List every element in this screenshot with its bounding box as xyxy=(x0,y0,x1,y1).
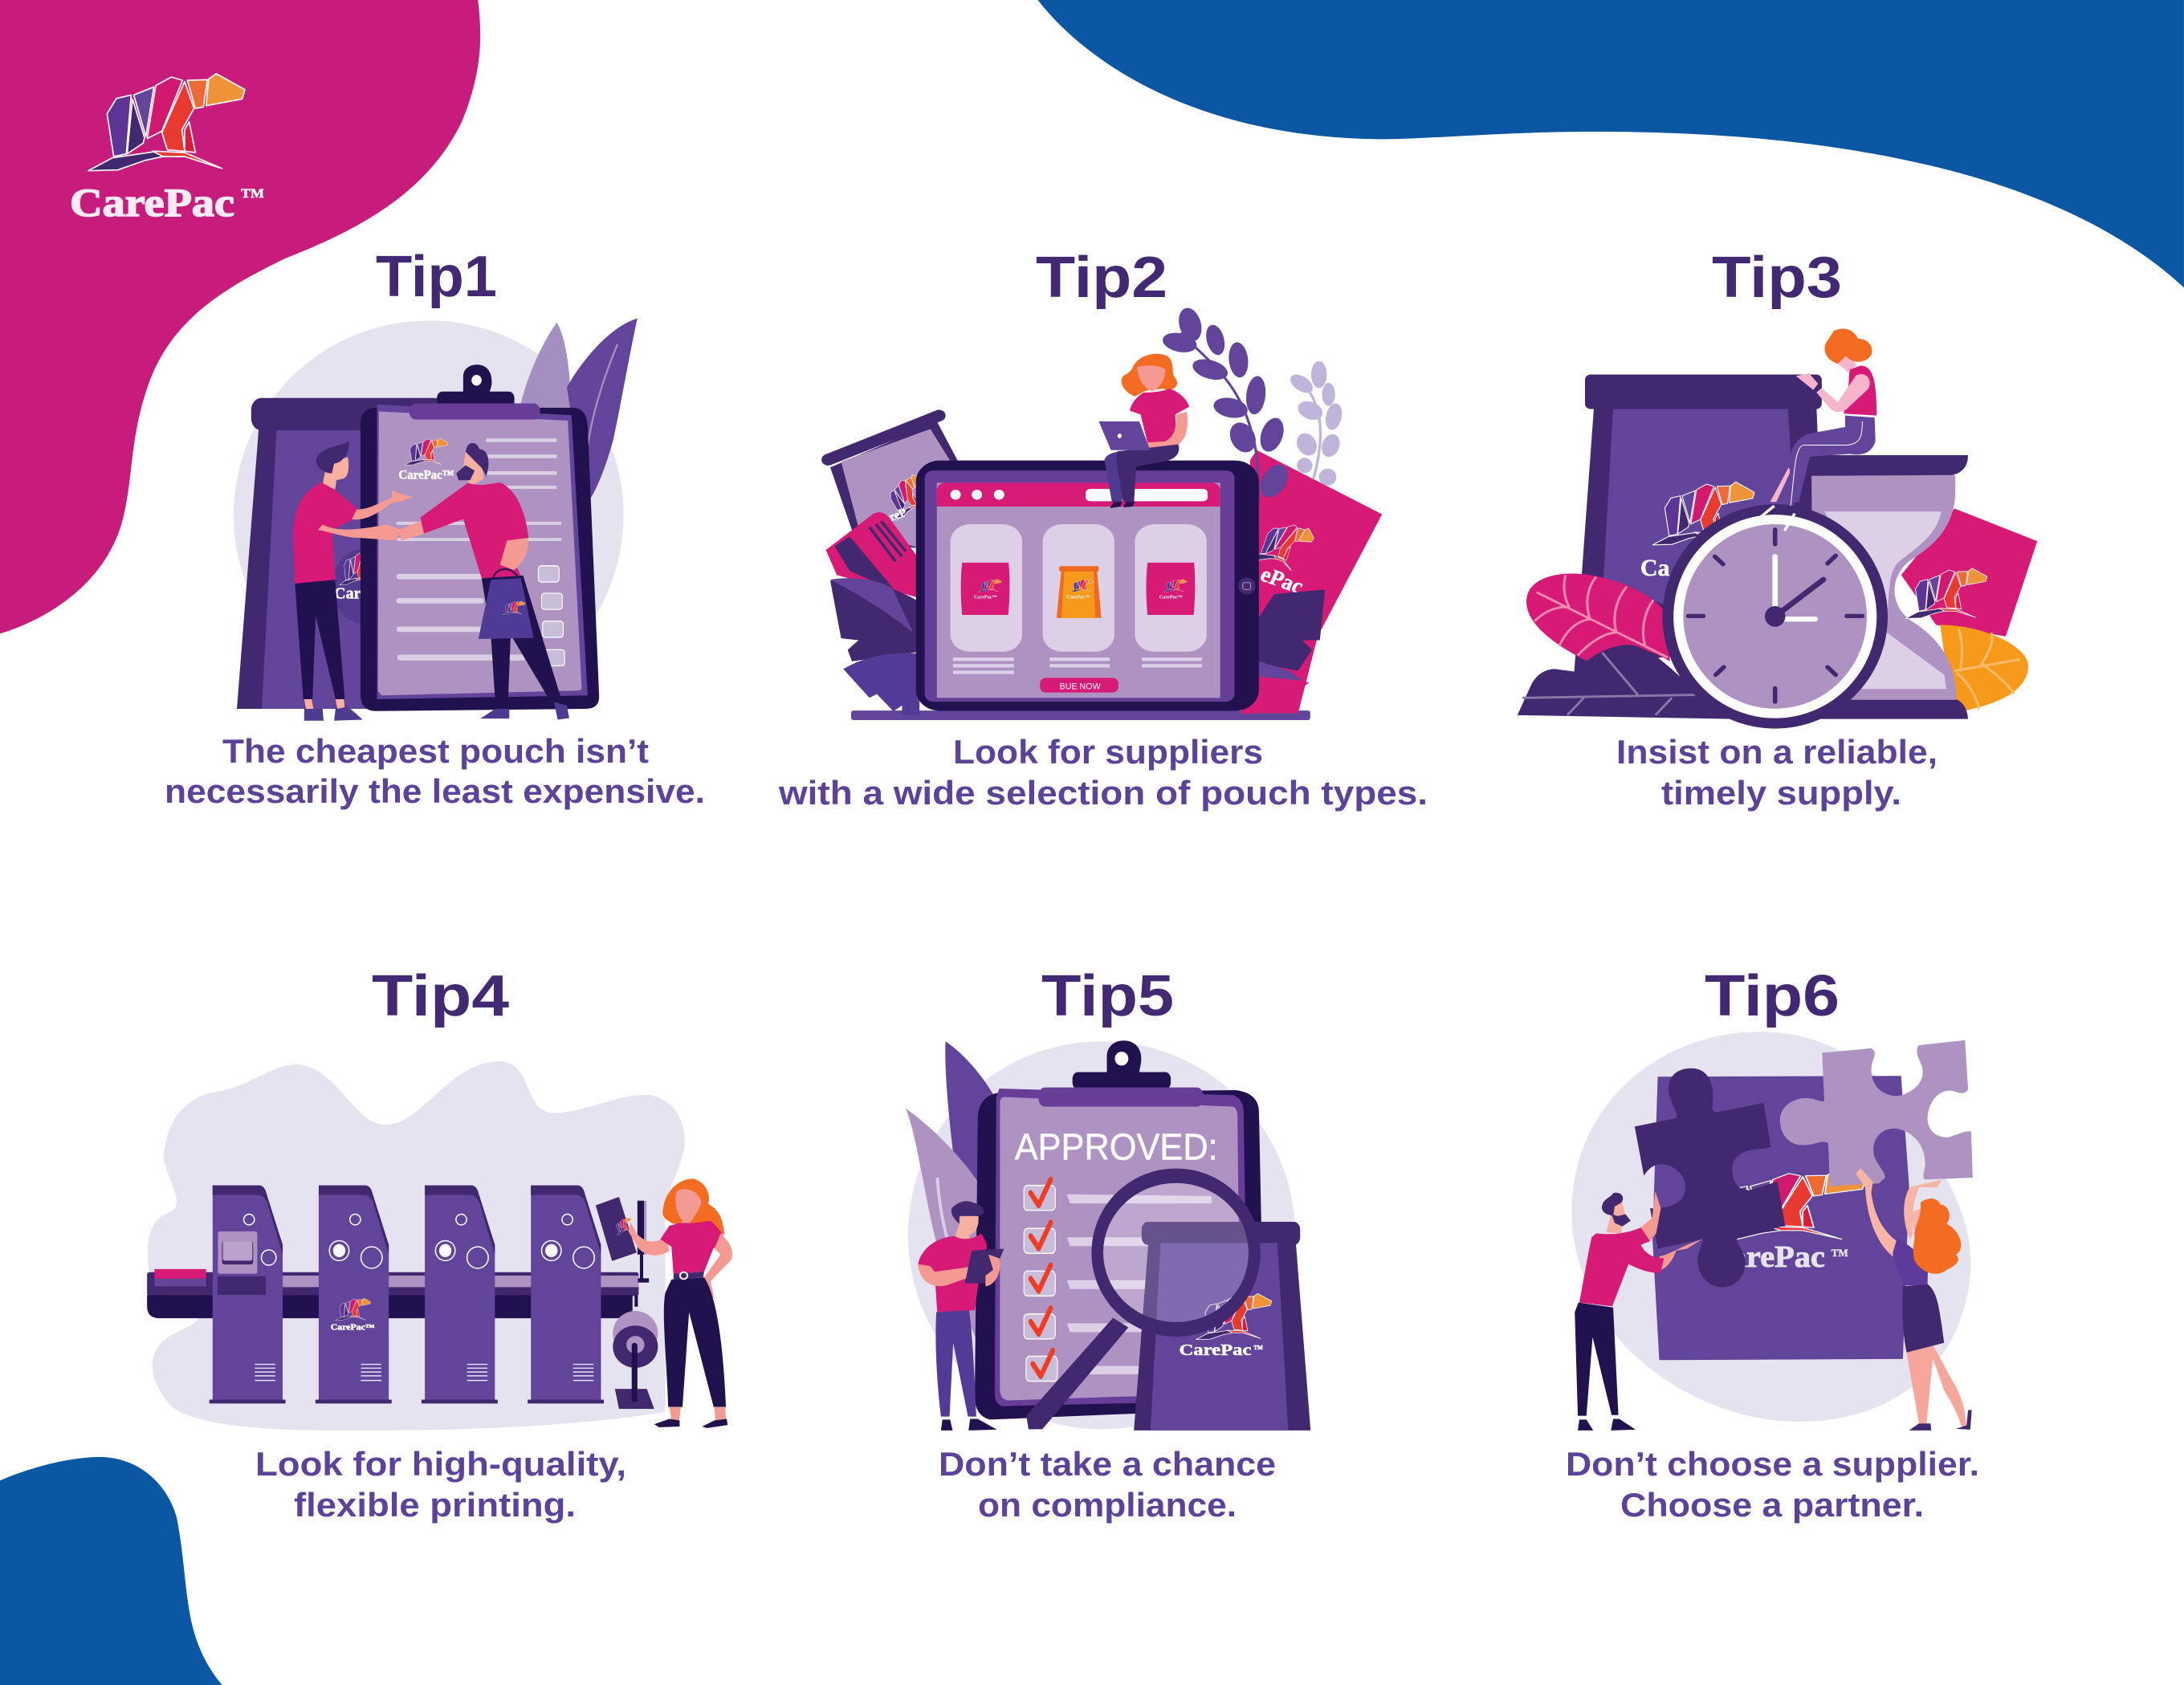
caption: tip 6: Choose a partner. xyxy=(1620,1486,1924,1524)
illustration: online store tablet with pouches xyxy=(826,306,1382,720)
caption: tip 3: timely supply. xyxy=(1661,774,1901,812)
logo: CarePac brand mark: CarePac xyxy=(70,180,234,225)
illustration: approved checklist with magnifier xyxy=(906,1040,1310,1431)
heading: Tip2: Tip2 xyxy=(1036,246,1167,310)
illustration: printing press with operator: CarePac™ xyxy=(331,1323,375,1332)
figure: man with clipboard xyxy=(918,1201,1004,1431)
heading: Tip3: Tip3 xyxy=(1712,246,1842,310)
figure: woman sitting on hourglass xyxy=(1758,329,1876,531)
figure: bearded man xyxy=(1575,1191,1702,1431)
caption: tip 5: on compliance. xyxy=(978,1486,1237,1524)
logo: CarePac brand mark: TM xyxy=(241,187,264,201)
icon: dark puzzle piece xyxy=(1635,1068,1785,1287)
heading: Tip4: Tip4 xyxy=(372,964,509,1028)
caption: tip 1: necessarily the least expensive. xyxy=(165,772,705,810)
illustration: handshake in front of clipboard and pouch xyxy=(234,319,638,721)
panel: tip 1 xyxy=(165,245,705,810)
figure: woman with orange hair xyxy=(1856,1168,1972,1431)
figure: left man xyxy=(292,441,413,721)
caption: tip 3: Insist on a reliable, xyxy=(1616,733,1937,771)
background shape: magenta top-left wave xyxy=(0,0,480,633)
illustration: approved checklist with magnifier: TM xyxy=(1253,1345,1263,1351)
background shape: blue bottom-left wave xyxy=(0,1457,222,1685)
figure: right man with bag xyxy=(399,443,569,719)
illustration: approved checklist with magnifier: CarePac xyxy=(1179,1341,1252,1359)
illustration: two people joining puzzle pieces xyxy=(1571,1032,1973,1431)
panel: tip 3 xyxy=(1518,246,2037,812)
heading: Tip1: Tip1 xyxy=(376,245,497,309)
caption: tip 4: Look for high-quality, xyxy=(255,1445,626,1483)
illustration: online store tablet with pouches: CarePac™ xyxy=(1159,595,1183,600)
panel: tip 4 xyxy=(147,964,732,1524)
heading: Tip6: Tip6 xyxy=(1705,964,1840,1028)
figure: operator woman xyxy=(629,1178,732,1428)
figure: woman with laptop xyxy=(1098,354,1189,508)
icon: magnifying glass xyxy=(1026,1176,1255,1429)
caption: tip 2: Look for suppliers xyxy=(953,733,1263,771)
illustration: handshake in front of clipboard and pouch: Car xyxy=(334,585,361,603)
panel: tip 2 xyxy=(778,246,1428,812)
illustration: two people joining puzzle pieces: CarePac xyxy=(1707,1240,1825,1274)
illustration: two people joining puzzle pieces: TM xyxy=(1832,1247,1848,1259)
text: APPROVED: APPROVED: xyxy=(1015,1126,1218,1168)
illustration: online store tablet with pouches: BUE NOW xyxy=(1060,682,1101,691)
caption: tip 6: Don’t choose a supplier. xyxy=(1566,1445,1979,1483)
illustration: handshake in front of clipboard and pouch: CarePac™ xyxy=(399,468,454,482)
icon: paper roller xyxy=(613,1201,658,1409)
icon: clock xyxy=(1662,504,1888,729)
logo: CarePac brand mark xyxy=(70,74,264,225)
background shape: blue top-right wave xyxy=(1038,0,2184,287)
illustration: online store tablet with pouches: CarePac™ xyxy=(1066,595,1090,600)
illustration: printing press with operator xyxy=(147,1061,732,1431)
illustration: pouch, clock and hourglass: Ca xyxy=(1640,555,1670,581)
icon: light puzzle piece xyxy=(1780,1040,1973,1186)
caption: tip 2: with a wide selection of pouch types. xyxy=(778,774,1428,812)
illustration: online store tablet with pouches: areP xyxy=(882,507,909,526)
panel: tip 6 xyxy=(1566,964,1979,1524)
caption: tip 5: Don’t take a chance xyxy=(939,1445,1276,1483)
panel: tip 5 xyxy=(906,964,1310,1524)
caption: tip 4: flexible printing. xyxy=(294,1486,576,1524)
caption: tip 1: The cheapest pouch isn’t xyxy=(222,732,649,770)
illustration: online store tablet with pouches: CarePac™ xyxy=(974,595,997,600)
illustration: online store tablet with pouches: ePac xyxy=(1257,562,1307,598)
illustration: pouch, clock and hourglass xyxy=(1518,329,2037,729)
heading: Tip5: Tip5 xyxy=(1041,964,1174,1028)
